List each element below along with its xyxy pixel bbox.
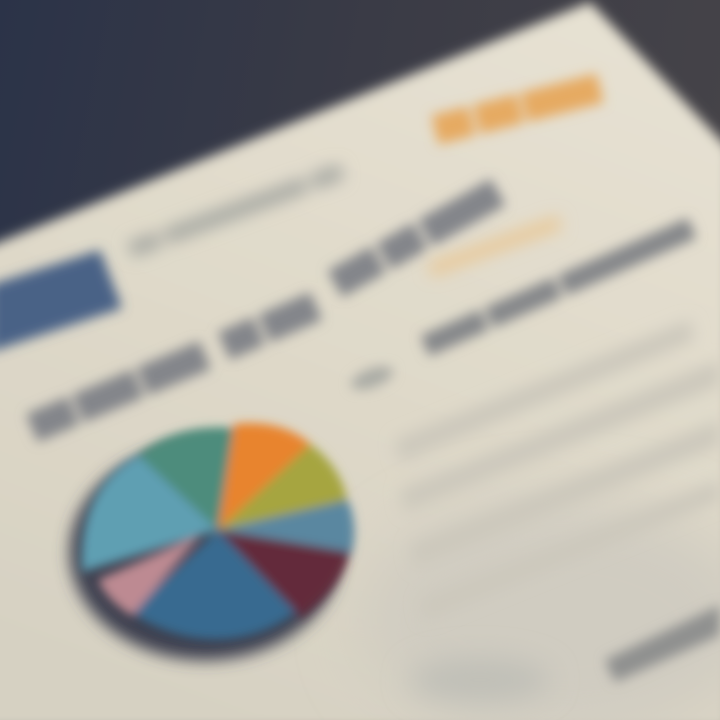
pie wedge: large blue [130,530,296,639]
text block: lower right dark lines [605,605,720,682]
pie wedge: light teal [82,455,218,572]
heading: orange figure [435,88,600,130]
pie wedge: orange [218,423,318,530]
text block: orange subline [430,222,560,270]
text block: grey subtitle bar [425,228,692,346]
text block: bottom blurred caption [410,658,550,702]
small grey mark [348,362,396,394]
pie wedge: maroon [218,530,350,618]
pie wedge: green teal [138,427,234,530]
pie wedge: yellow green [218,444,348,530]
pie shadow [70,444,340,660]
heading: small grey title [130,170,345,250]
blue label box [0,250,122,352]
chart: pie chart [70,423,354,660]
text block: grey bars headline [32,192,498,428]
pie wedge: pink [98,535,200,616]
text block: faint paragraph lines [395,320,720,620]
pie wedge: steel blue [218,500,354,556]
